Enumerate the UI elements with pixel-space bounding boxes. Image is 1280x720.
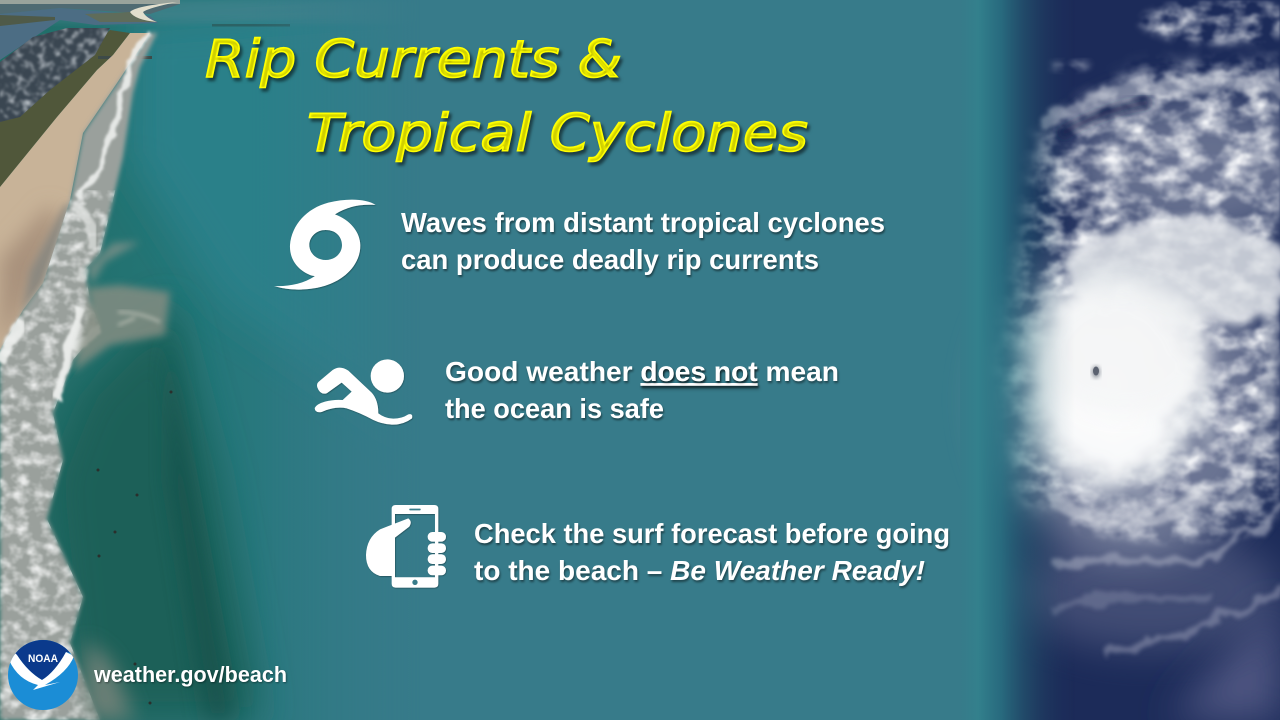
sand plume — [73, 285, 170, 372]
text: cyclone waves line 1: Waves from distant tropical cyclones — [401, 207, 885, 238]
vegetation strip — [0, 30, 130, 187]
swimmers — [96, 390, 172, 704]
link text: weather.gov/beach — [93, 662, 287, 687]
text: good weather line 2: the ocean is safe — [445, 393, 664, 424]
photo: aerial beach — [0, 0, 325, 720]
houses — [0, 25, 112, 125]
text: surf forecast line 1: Check the surf forecast before going — [474, 518, 950, 549]
sand — [0, 33, 150, 350]
text: cyclone waves line 2: can produce deadly rip currents — [401, 244, 819, 275]
icon: cyclone — [274, 200, 376, 290]
icon: hand holding phone — [366, 505, 446, 588]
sky and distant water — [0, 0, 344, 60]
cyclone core — [1004, 257, 1220, 507]
pier — [98, 56, 152, 59]
logo: NOAA — [0, 640, 86, 710]
logo: NOAA: NOAA — [28, 653, 58, 665]
surf foam — [0, 33, 157, 720]
photo: satellite hurricane — [960, 0, 1280, 720]
icon: swimmer — [315, 359, 412, 425]
title line 2: Tropical Cyclones — [307, 104, 808, 164]
text: good weather line 1: Good weather does not mean — [445, 356, 839, 387]
cloud gap — [1060, 102, 1150, 135]
eye — [1092, 366, 1100, 378]
text: surf forecast line 2: to the beach – Be Weather Ready! — [474, 555, 925, 586]
title line 1: Rip Currents & — [205, 30, 622, 90]
